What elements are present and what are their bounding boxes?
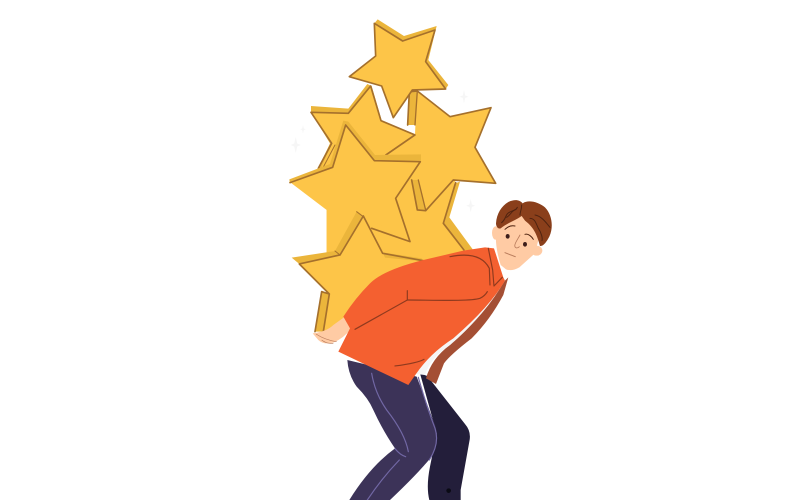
sparkles	[291, 90, 475, 212]
front leg	[347, 360, 437, 500]
legs	[347, 360, 470, 500]
eyes	[506, 234, 510, 239]
back leg	[420, 373, 470, 500]
white shirt strip	[416, 280, 505, 375]
jacket	[338, 247, 505, 385]
star: right	[386, 90, 496, 211]
star pile	[289, 19, 496, 332]
brown shirt	[426, 277, 508, 384]
nose	[515, 235, 520, 248]
hair	[496, 200, 552, 246]
trouser seams	[367, 373, 437, 500]
mouth	[505, 253, 515, 257]
head	[492, 200, 552, 270]
star: top	[349, 19, 448, 118]
face	[496, 216, 540, 270]
ear left	[492, 226, 499, 240]
star: back left	[311, 84, 415, 170]
man	[313, 200, 552, 500]
knee dot	[446, 488, 451, 493]
inner shirt and jacket	[313, 247, 508, 385]
star: lower right	[327, 177, 473, 277]
brows	[505, 226, 533, 239]
ear right	[531, 246, 542, 256]
hand	[313, 317, 352, 343]
star: middle large	[289, 121, 421, 263]
hair strands	[502, 205, 550, 241]
jacket folds	[355, 248, 502, 366]
star: bottom	[292, 212, 430, 332]
finger lines	[316, 334, 337, 343]
